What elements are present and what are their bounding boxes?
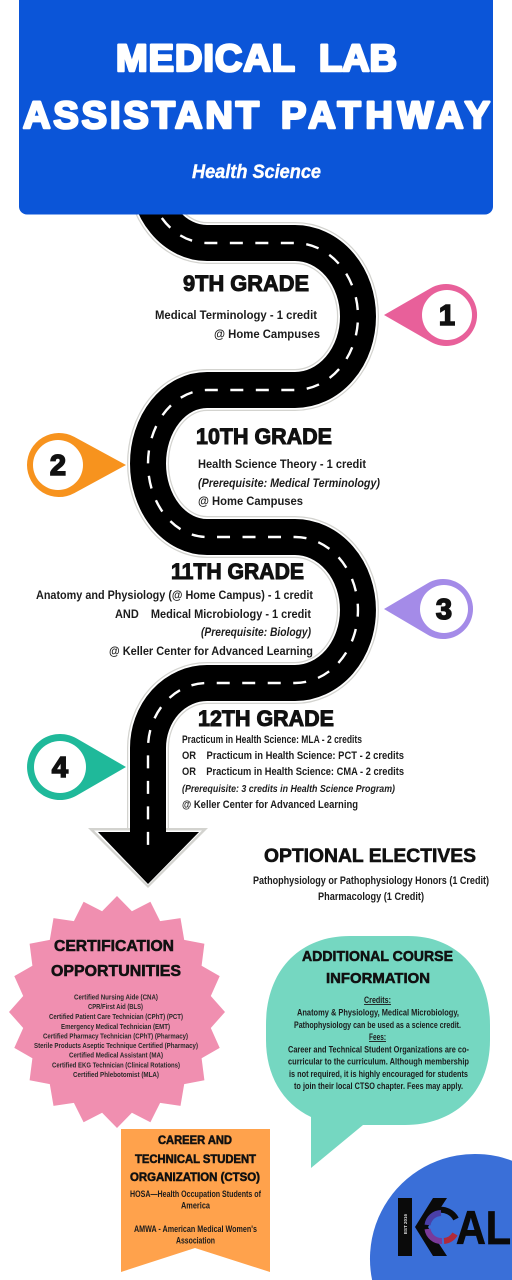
course information text: Credits: (364, 995, 391, 1005)
9th grade (155, 271, 320, 341)
pin 1 (384, 284, 477, 346)
12th grade (182, 706, 404, 811)
heading (302, 948, 453, 987)
certification list: CPR/First Aid (BLS) (88, 1004, 143, 1011)
logo: KCAL on blue circle (370, 1154, 512, 1280)
9th grade: 9TH GRADE (183, 271, 309, 296)
organizations: Association (176, 1236, 215, 1246)
course information text: to join their local CTSO chapter. Fees may apply. (294, 1081, 463, 1091)
heading: INFORMATION (326, 970, 430, 987)
12th grade: 12TH GRADE (198, 706, 334, 731)
11th grade (36, 559, 313, 658)
heading (51, 938, 181, 980)
9th grade: @ Home Campuses (214, 327, 320, 341)
certification list: Certified Medical Assistant (MA) (69, 1052, 163, 1060)
11th grade: 11TH GRADE (171, 559, 304, 584)
heading: CAREER AND (158, 1133, 232, 1147)
course information text (288, 995, 469, 1091)
12th grade: OR Practicum in Health Science: CMA - 2 credits (182, 766, 404, 778)
10th grade: 10TH GRADE (196, 424, 332, 449)
certification list: Certified Phlebotomist (MLA) (73, 1072, 159, 1079)
11th grade: @ Keller Center for Advanced Learning (109, 644, 313, 658)
10th grade: Health Science Theory - 1 credit (198, 457, 366, 471)
header banner (19, 0, 493, 214)
certification list: Certified Patient Care Technician (CPhT) (PCT) (49, 1014, 183, 1021)
organizations: HOSA—Health Occupation Students of (130, 1189, 262, 1199)
pin 3: 3 (436, 594, 452, 626)
title: ASSISTANT (23, 95, 259, 137)
pin 3 (384, 579, 473, 639)
title: PATHWAY (281, 95, 490, 137)
11th grade: AND Medical Microbiology - 1 credit (115, 607, 311, 621)
9th grade: Medical Terminology - 1 credit (155, 308, 317, 322)
certification list (34, 994, 198, 1079)
logo: KCAL on blue circle: EST 2016 (403, 1213, 408, 1234)
heading: ADDITIONAL COURSE (302, 948, 453, 965)
title: MEDICAL (116, 38, 295, 80)
11th grade: (Prerequisite: Biology) (201, 625, 311, 639)
certification list: Sterile Products Aseptic Technique Certified (Pharmacy) (34, 1043, 198, 1050)
organizations: America (181, 1200, 211, 1210)
panel: additional course information (266, 936, 490, 1168)
panel: certification opportunities (9, 896, 225, 1128)
certification list: Certified EKG Technician (Clinical Rotations) (52, 1062, 180, 1070)
heading: TECHNICAL STUDENT (135, 1152, 257, 1166)
heading: OPPORTUNITIES (51, 963, 181, 980)
winding road (88, 170, 358, 888)
course information text: is not required, it is highly encouraged for students (289, 1069, 468, 1079)
heading: ORGANIZATION (CTSO) (130, 1170, 260, 1184)
10th grade: (Prerequisite: Medical Terminology) (198, 476, 380, 490)
course information text: curricular to the curriculum. Although membership (288, 1056, 469, 1066)
10th grade: @ Home Campuses (198, 494, 303, 508)
11th grade: Anatomy and Physiology (@ Home Campus) - 1 credit (36, 588, 313, 602)
course information text: Career and Technical Student Organizations are co- (288, 1044, 469, 1054)
organizations: AMWA - American Medical Women's (134, 1224, 257, 1234)
heading (130, 1133, 260, 1184)
organizations (130, 1189, 262, 1246)
optional electives (253, 846, 489, 903)
optional electives: Pharmacology (1 Credit) (318, 891, 424, 903)
optional electives: OPTIONAL ELECTIVES (264, 846, 476, 867)
course information text: Fees: (369, 1032, 386, 1042)
panel: CTSO ribbon (121, 1129, 270, 1272)
course information text: Pathophysiology can be used as a science credit. (294, 1020, 461, 1030)
course information text: Anatomy & Physiology, Medical Microbiology, (297, 1008, 459, 1018)
pin 4: 4 (52, 752, 68, 784)
pin 1: 1 (439, 300, 455, 332)
12th grade: OR Practicum in Health Science: PCT - 2 credits (182, 750, 404, 762)
certification list: Emergency Medical Technician (EMT) (61, 1024, 170, 1031)
certification list: Certified Nursing Aide (CNA) (74, 994, 158, 1002)
12th grade: Practicum in Health Science: MLA - 2 credits (182, 734, 362, 746)
subtitle: Health Science (192, 162, 321, 183)
pin 2: 2 (50, 450, 66, 482)
12th grade: @ Keller Center for Advanced Learning (182, 799, 358, 811)
10th grade (196, 424, 380, 508)
title: LAB (319, 38, 397, 80)
title (23, 38, 490, 137)
heading: CERTIFICATION (54, 938, 174, 955)
pin 2 (27, 433, 126, 497)
certification list: Certified Pharmacy Technician (CPhT) (Pharmacy) (43, 1034, 188, 1040)
pin 4 (27, 734, 126, 800)
12th grade: (Prerequisite: 3 credits in Health Science Program) (182, 783, 395, 795)
